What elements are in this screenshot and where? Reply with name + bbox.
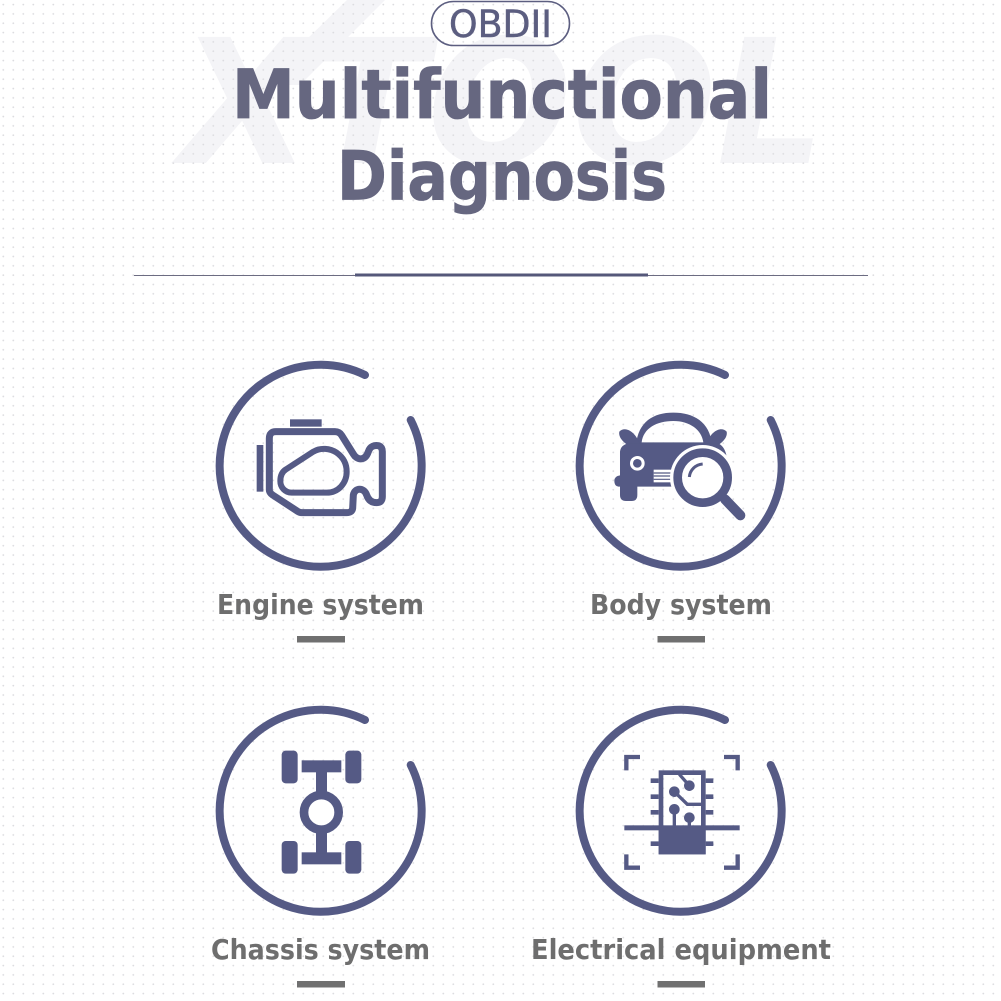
ring: body (580, 365, 782, 567)
panel: electrical equipment (531, 710, 831, 988)
panel: chassis system (211, 710, 430, 988)
badge: OBDII: OBDII (449, 3, 552, 46)
ring: electrical (580, 710, 782, 912)
title: Multifunctional Diagnosis (232, 56, 772, 216)
bar: electrical (658, 981, 705, 988)
label: Chassis system: Chassis system (211, 933, 430, 966)
icon: circuit chip (624, 757, 740, 868)
icon: chassis (282, 751, 361, 874)
icon: engine (257, 419, 382, 513)
icon: car with magnifier (614, 413, 740, 515)
bar: body (658, 636, 705, 642)
label: Electrical equipment: Electrical equipment (531, 933, 831, 966)
panel: body system (580, 365, 782, 642)
title: Multifunctional Diagnosis: Multifunctional (232, 56, 772, 135)
panel: engine system (217, 365, 424, 642)
watermark: XTOOL logo: XTOOL (171, 2, 825, 204)
ring: chassis (220, 710, 422, 912)
title: Multifunctional Diagnosis: Diagnosis (337, 138, 667, 216)
bar: engine (297, 636, 345, 642)
label: Engine system: Engine system (217, 588, 424, 621)
divider (134, 274, 868, 276)
ring: engine (220, 365, 422, 567)
bar: chassis (297, 981, 345, 988)
label: Body system: Body system (590, 588, 772, 621)
